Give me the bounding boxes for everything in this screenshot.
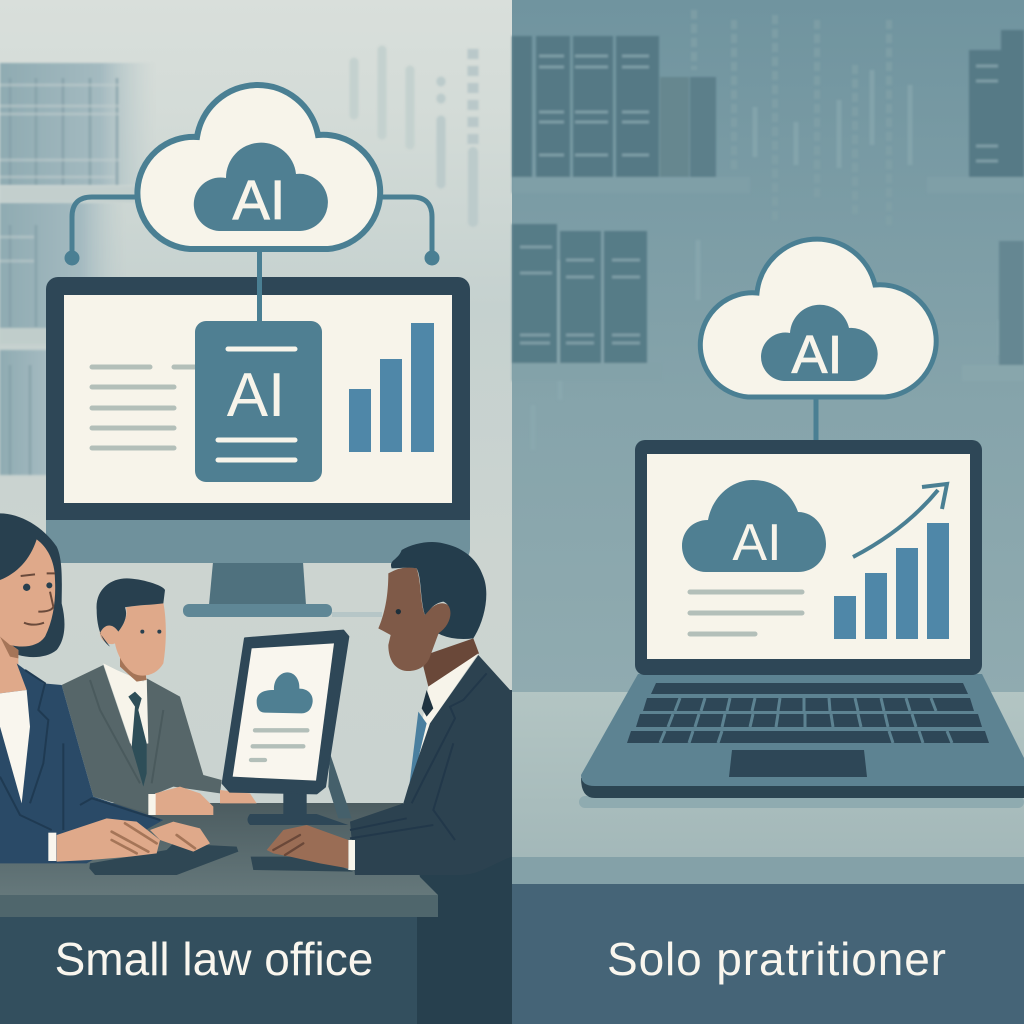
keyboard (627, 683, 989, 743)
cloud AI icon (137, 85, 380, 249)
people (0, 513, 512, 875)
counter (512, 692, 1024, 1024)
AI document card: AI (227, 361, 285, 430)
text lines (92, 367, 196, 448)
desktop monitor (46, 277, 470, 617)
laptop (581, 440, 1024, 798)
man in dark suit (267, 542, 512, 875)
growth chart (834, 523, 949, 639)
desk (0, 803, 512, 1024)
man in grey suit (62, 578, 257, 815)
label: Solo pratritioner: Solo pratritioner (607, 933, 946, 985)
tablet on stand (223, 631, 352, 825)
growth arrow (853, 484, 947, 557)
keyboards (89, 843, 353, 875)
label: Small law office: Small law office (55, 933, 373, 985)
cloud on screen (682, 480, 826, 572)
connector lines (67, 197, 437, 321)
bar chart (349, 323, 434, 452)
trackpad (729, 750, 867, 777)
laptop: AI (732, 514, 782, 572)
background bookshelves (0, 49, 473, 475)
cloud AI icon: AI (233, 168, 285, 231)
connector line (814, 396, 818, 442)
panel: solo practitioner (512, 0, 1024, 1024)
cloud AI icon: AI (791, 325, 843, 385)
background bookshelves (512, 10, 1024, 450)
cloud AI icon (700, 239, 936, 397)
AI document card (195, 321, 322, 482)
woman in navy suit (0, 513, 210, 863)
panel: small law office (0, 0, 512, 1024)
